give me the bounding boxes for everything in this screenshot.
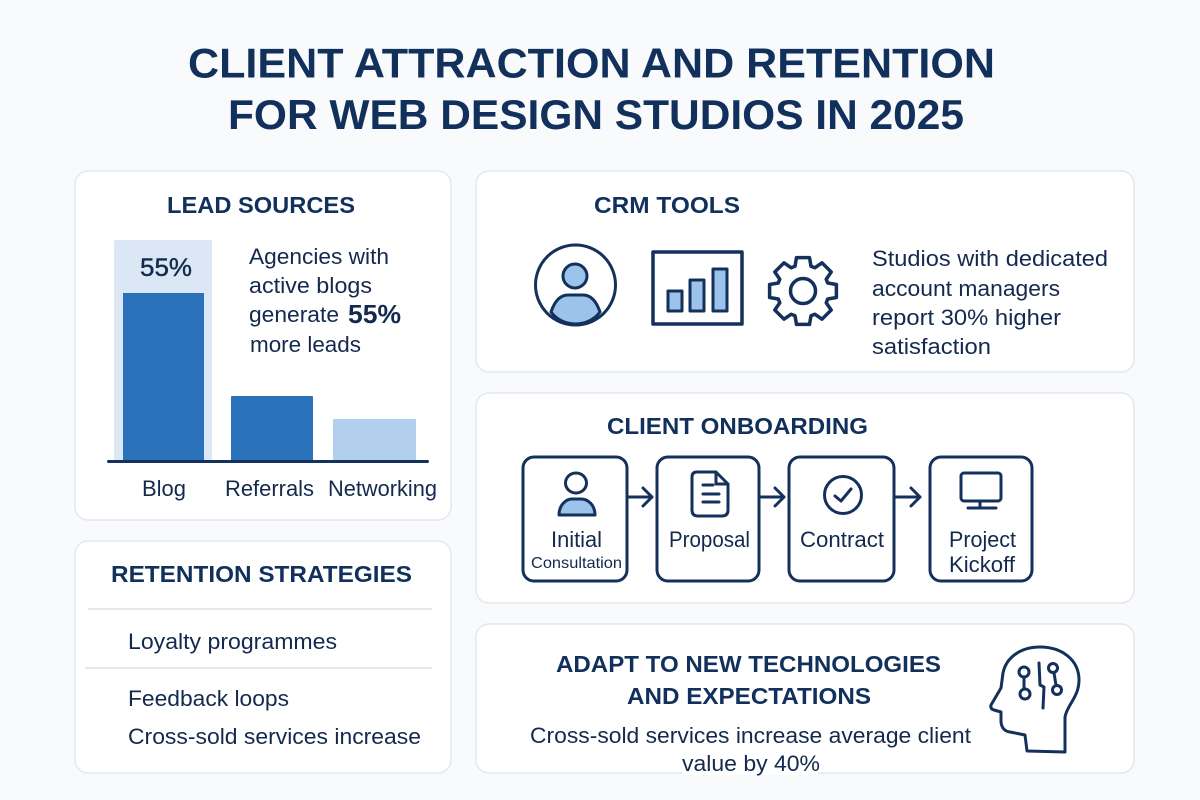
title	[188, 40, 995, 138]
step: initial consultation	[523, 457, 627, 581]
bar chart: lead sources: Networking	[328, 476, 437, 501]
heading: client onboarding: CLIENT ONBOARDING	[607, 413, 868, 439]
panel: client onboarding	[476, 393, 1134, 603]
text: blog statistic: generate	[249, 302, 339, 327]
text: account manager statistic: report 30% higher	[872, 305, 1061, 330]
text: blog statistic: active blogs	[249, 273, 372, 298]
icon: bar chart	[653, 252, 742, 324]
icon: user in circle	[536, 245, 616, 325]
step: project kickoff: Project	[949, 527, 1016, 552]
step: project kickoff	[930, 457, 1032, 581]
bar chart: lead sources: Blog	[142, 476, 186, 501]
text: blog statistic: more leads	[250, 332, 361, 357]
heading: lead sources: LEAD SOURCES	[167, 192, 355, 218]
panel: crm tools	[476, 171, 1134, 372]
title: FOR WEB DESIGN STUDIOS IN 2025	[228, 91, 964, 138]
arrow: step three to four	[894, 488, 920, 506]
heading: retention strategies: RETENTION STRATEGIES	[111, 561, 412, 587]
bar chart: lead sources: Referrals	[225, 476, 314, 501]
title: CLIENT ATTRACTION AND RETENTION	[188, 40, 995, 86]
step: contract	[789, 457, 894, 581]
step: proposal: Proposal	[669, 527, 750, 552]
list: retention items: Cross-sold services increase	[128, 724, 421, 749]
panel: adapt to new technologies	[476, 624, 1134, 776]
step: project kickoff: Kickoff	[949, 552, 1016, 577]
list: retention items: Feedback loops	[128, 686, 289, 711]
text: account manager statistic: satisfaction	[872, 334, 991, 359]
text: blog statistic: 55%	[348, 299, 401, 329]
icon: gear	[770, 258, 836, 324]
step: contract: Contract	[800, 527, 884, 552]
bar chart: lead sources: 55%	[140, 254, 192, 282]
text: blog statistic: Agencies with	[249, 244, 389, 269]
panel: lead sources	[75, 171, 451, 520]
text: cross-sold statistic: Cross-sold services increase average client	[530, 723, 971, 748]
text: blog statistic	[249, 244, 401, 357]
arrow: step two to three	[759, 488, 784, 506]
text: cross-sold statistic: value by 40%	[682, 751, 820, 776]
step: proposal	[657, 457, 759, 581]
icon: head with circuits	[991, 647, 1079, 752]
text: account manager statistic: Studios with dedicated	[872, 246, 1108, 271]
bar chart: lead sources	[107, 240, 437, 501]
list: retention items	[128, 629, 421, 749]
panel: retention strategies	[75, 541, 451, 773]
text: account manager statistic	[872, 246, 1108, 359]
text: cross-sold statistic	[530, 723, 971, 776]
text: account manager statistic: account managers	[872, 276, 1060, 301]
heading: adapt to new technologies: AND EXPECTATIONS	[627, 683, 871, 709]
arrow: step one to two	[627, 488, 652, 506]
heading: crm tools: CRM TOOLS	[594, 192, 740, 218]
heading: adapt to new technologies	[556, 651, 941, 709]
heading: adapt to new technologies: ADAPT TO NEW TECHNOLOGIES	[556, 651, 941, 677]
list: retention items: Loyalty programmes	[128, 629, 337, 654]
step: initial consultation: Initial	[551, 527, 602, 552]
step: initial consultation: Consultation	[531, 555, 622, 572]
